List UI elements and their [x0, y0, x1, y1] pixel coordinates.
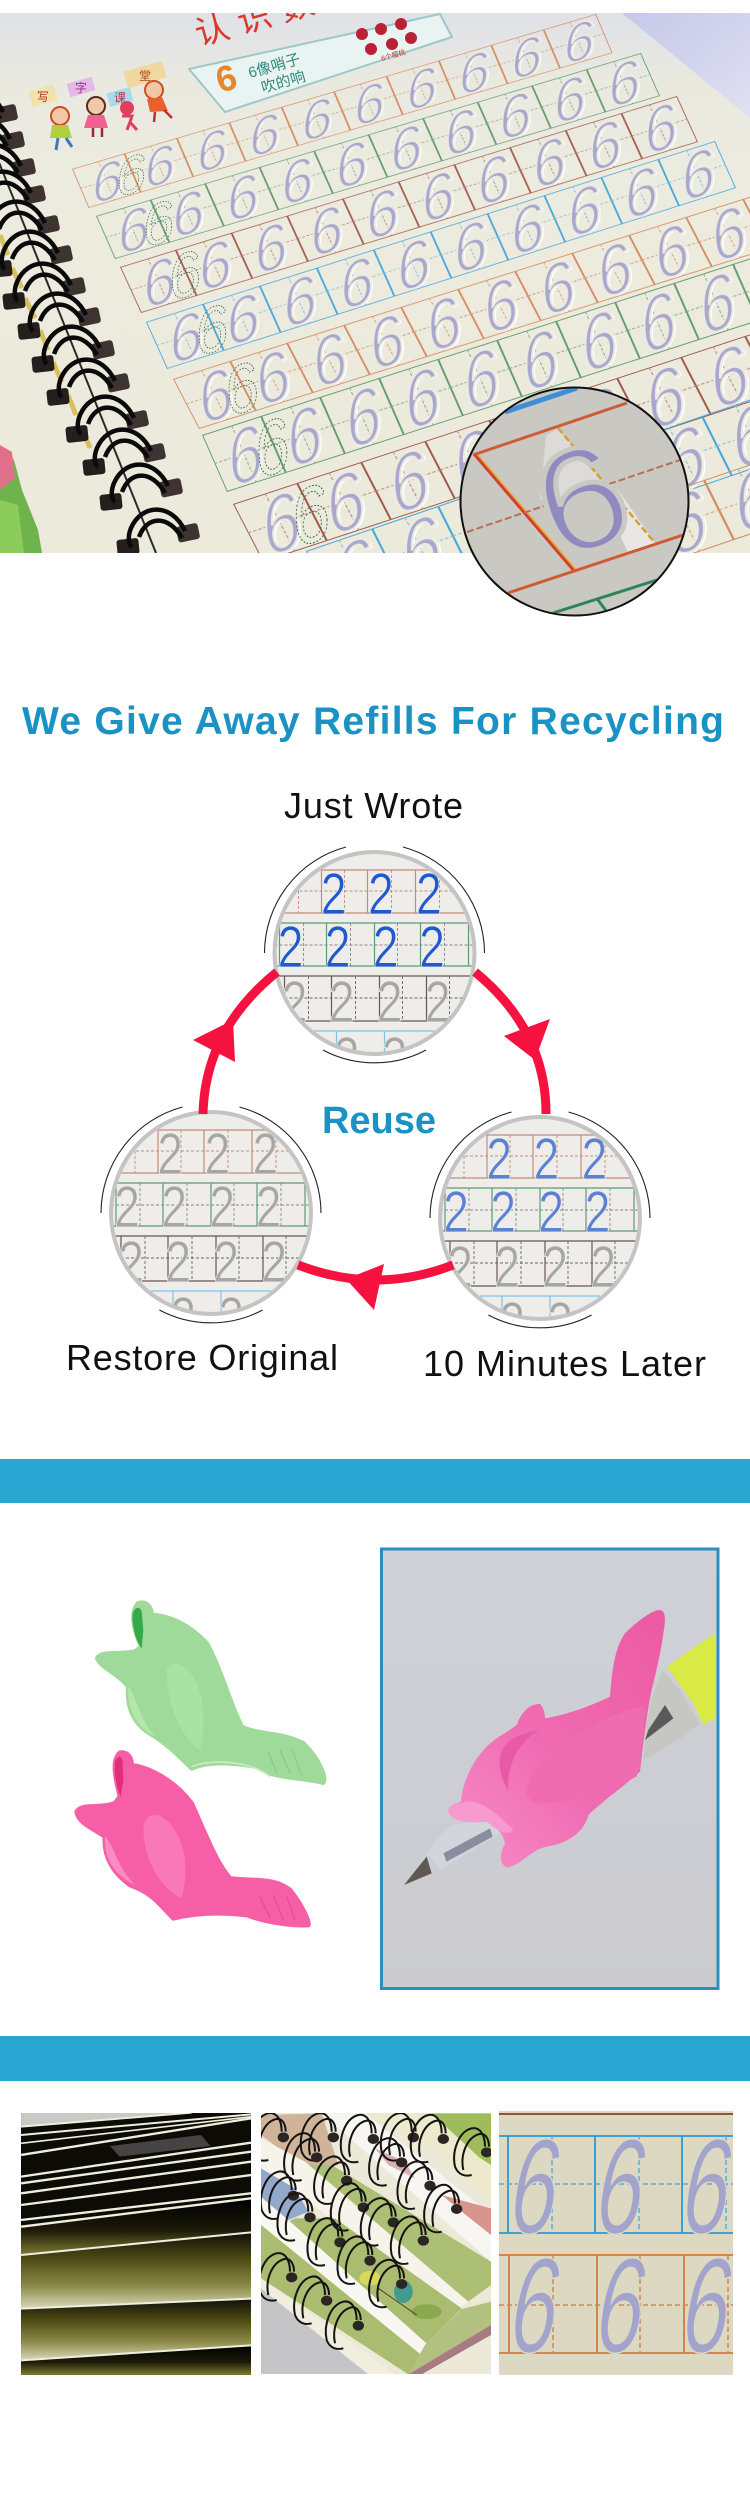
orange grid row: [499, 2254, 733, 2354]
magnifier circle showing embossed 6: 6: [513, 409, 651, 592]
blue grid row: 6: [586, 2112, 659, 2263]
lesson banner with text: 吹的响: [259, 68, 307, 97]
circle: restored grey 2s: [100, 1106, 322, 1324]
lesson banner with text: 6像哨子: [246, 51, 302, 82]
blue grid row: 6: [672, 2112, 745, 2263]
arrow: just wrote to ten minutes later: [475, 972, 550, 1114]
orange grid row: 6: [500, 2231, 573, 2382]
label: just wrote: Just Wrote: [284, 785, 463, 826]
blue grid row: [499, 2113, 733, 2234]
cartoon kids holding signs: 字: [75, 80, 87, 95]
label: ten minutes later: 10 Minutes Later: [423, 1343, 706, 1384]
arrow: ten minutes later to restore original: [298, 1264, 453, 1310]
lesson banner with text: [188, 13, 453, 113]
notebook covers and page edges: [261, 2113, 491, 2374]
photo: spiral bound notebooks: [251, 2112, 493, 2377]
cartoon kids holding signs: 写: [37, 90, 49, 104]
pink dolphin grip: [77, 1753, 309, 1925]
leaf pattern: [359, 2271, 442, 2319]
lesson banner with text: 6: [211, 56, 241, 101]
blue grid row: 6: [500, 2112, 573, 2263]
cartoon kids holding signs: [28, 61, 172, 150]
illustrated cover corner: [0, 445, 42, 553]
divider band one: [0, 1459, 750, 1503]
heading: refills: We Give Away Refills For Recycling: [22, 700, 724, 743]
green dolphin grip: [97, 1603, 324, 1783]
magnifier circle showing embossed 6: [460, 388, 688, 616]
spiral binding: [0, 91, 200, 556]
pink dolphin: [448, 1610, 665, 1867]
cartoon kids holding signs: 课: [114, 91, 126, 105]
circle: faded blue 2s: [429, 1112, 651, 1328]
photo: dolphin grip on pen: [382, 1549, 718, 1988]
orange grid row: 6: [586, 2231, 659, 2382]
desk background: [622, 13, 750, 118]
cartoon kids holding signs: 堂: [139, 69, 151, 83]
lower olive pages: [21, 2200, 251, 2375]
orange grid row: 6: [672, 2231, 745, 2382]
pen barrel and grip: [404, 1633, 715, 1885]
lesson banner with text: 6个樱桃: [380, 47, 406, 63]
wire rings: [251, 2113, 492, 2349]
workbook page: [0, 13, 750, 553]
practice rows of number 6: [72, 14, 750, 553]
photo: loose dolphin pen grips: [77, 1603, 324, 1925]
circle: freshly written blue 2s: [264, 846, 486, 1064]
photo: workbook with embossed number 6 practice grid: [0, 13, 750, 553]
arrow: restore original to just wrote: [193, 972, 277, 1114]
cycle arrows: [193, 972, 550, 1310]
divider band two: [0, 2036, 750, 2081]
photo: thick page stack: [21, 2113, 251, 2375]
photo: close-up of embossed 6 grids: [499, 2111, 745, 2382]
label: restore original: Restore Original: [66, 1337, 338, 1378]
label: reuse: Reuse: [322, 1100, 436, 1142]
